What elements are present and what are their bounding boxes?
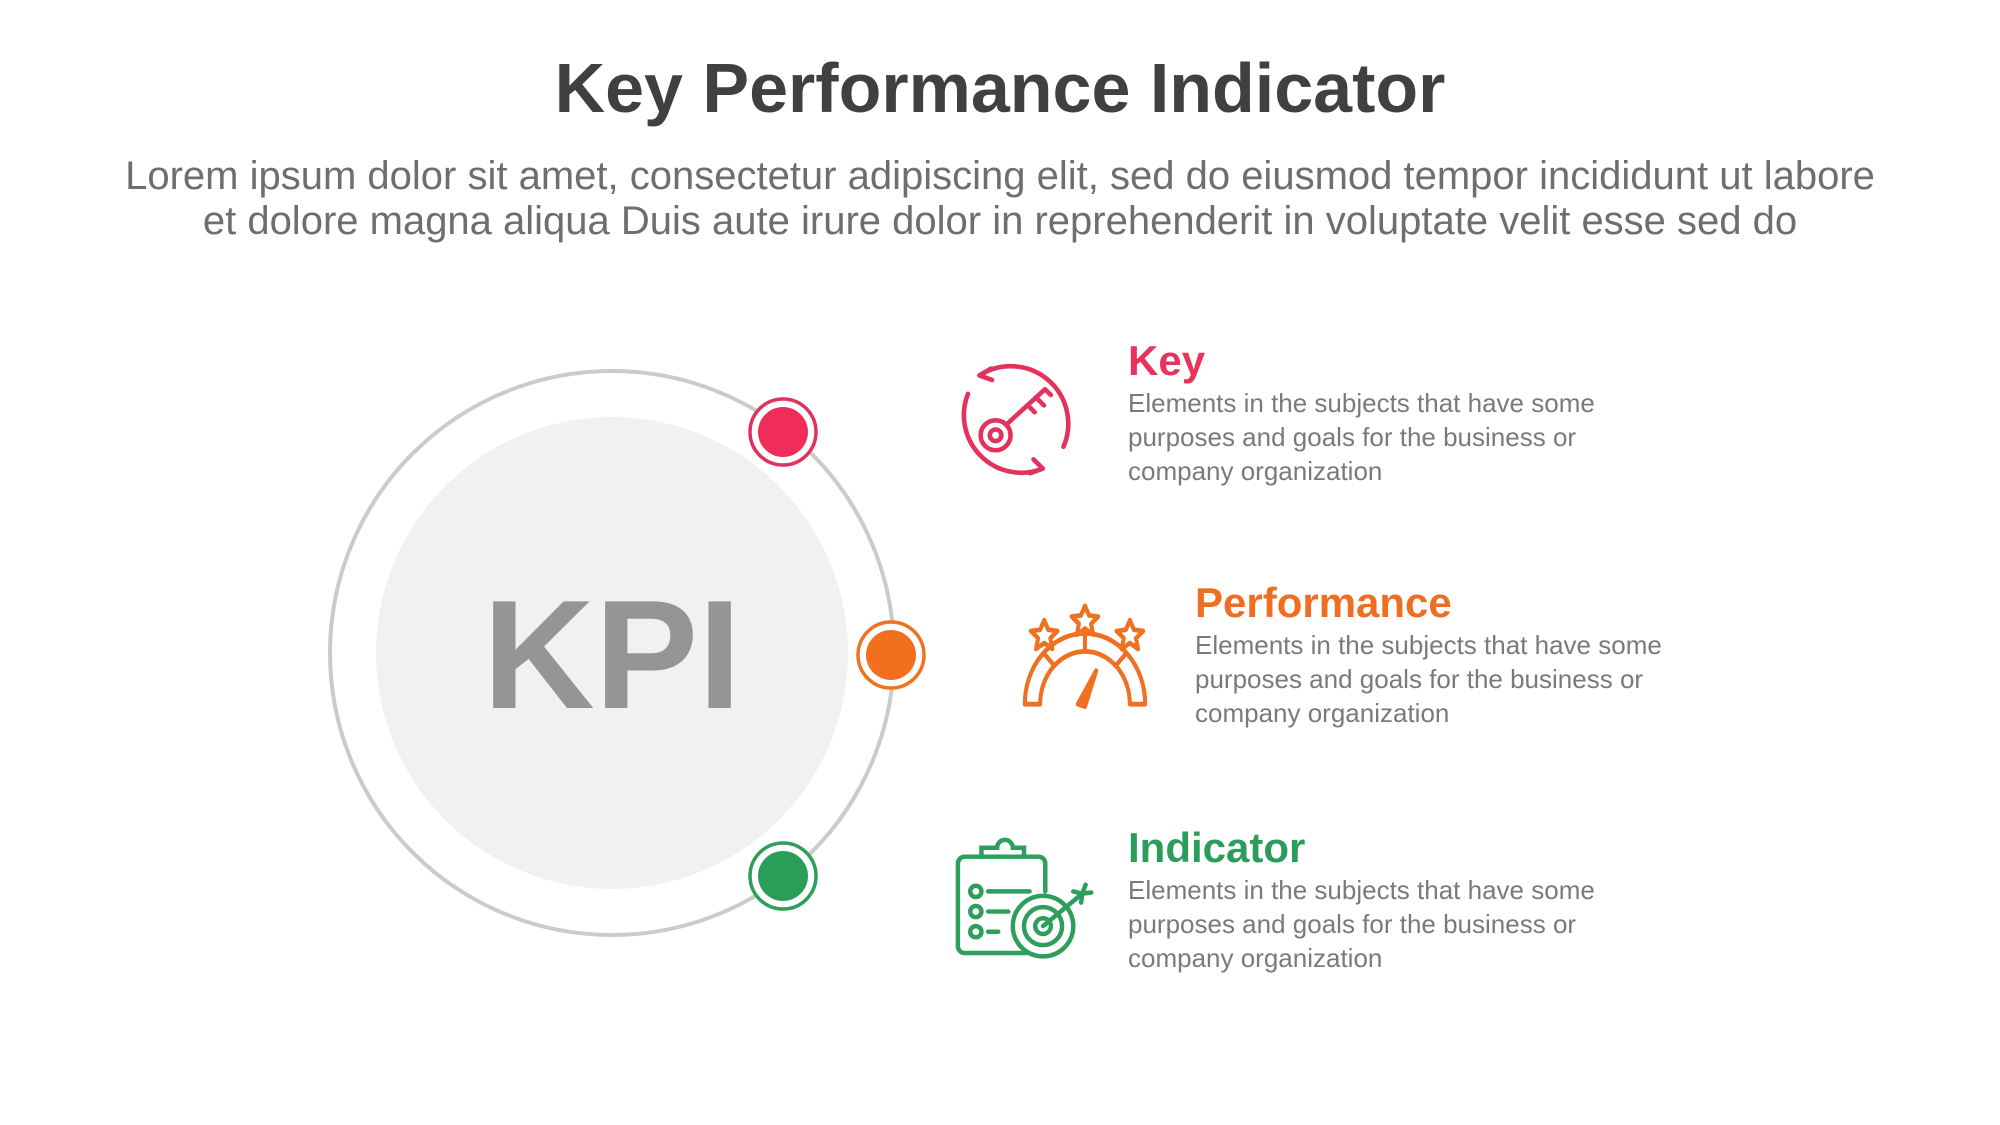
desc: Performance bbox=[1195, 630, 1662, 728]
desc: Key: Elements in the subjects that have some bbox=[1128, 388, 1595, 418]
inner circle bbox=[376, 417, 848, 889]
heading: Key: Key bbox=[1128, 337, 1205, 384]
desc: Performance: purposes and goals for the business or bbox=[1195, 664, 1643, 694]
outer ring bbox=[330, 371, 894, 935]
desc: Performance: Elements in the subjects that have some bbox=[1195, 630, 1662, 660]
subtitle: Lorem ipsum dolor sit amet, consectetur adipiscing elit, sed do eiusmod tempor incididunt ut labore bbox=[125, 154, 1875, 198]
dot: green bbox=[750, 843, 816, 909]
item: Performance bbox=[1195, 579, 1662, 728]
KPI label: KPI bbox=[483, 568, 741, 741]
desc: Indicator: company organization bbox=[1128, 943, 1382, 973]
desc: Key: company organization bbox=[1128, 456, 1382, 486]
item: Indicator bbox=[1128, 824, 1595, 973]
item: Key bbox=[1128, 337, 1595, 486]
title: Key Performance Indicator bbox=[555, 49, 1445, 127]
desc: Key bbox=[1128, 388, 1595, 486]
desc: Indicator: Elements in the subjects that have some bbox=[1128, 875, 1595, 905]
dot: red bbox=[750, 399, 816, 465]
desc: Performance: company organization bbox=[1195, 698, 1449, 728]
icon: gauge bbox=[1025, 606, 1145, 707]
subtitle bbox=[125, 154, 1875, 243]
desc: Key: purposes and goals for the business or bbox=[1128, 422, 1576, 452]
subtitle: et dolore magna aliqua Duis aute irure dolor in reprehenderit in voluptate velit esse sed do bbox=[203, 199, 1797, 243]
icon: key bbox=[964, 366, 1068, 473]
icon: clipboard target bbox=[958, 840, 1091, 956]
heading: Indicator: Indicator bbox=[1128, 824, 1305, 871]
desc: Indicator: purposes and goals for the business or bbox=[1128, 909, 1576, 939]
desc: Indicator bbox=[1128, 875, 1595, 973]
dot: orange bbox=[858, 622, 924, 688]
heading: Performance: Performance bbox=[1195, 579, 1452, 626]
